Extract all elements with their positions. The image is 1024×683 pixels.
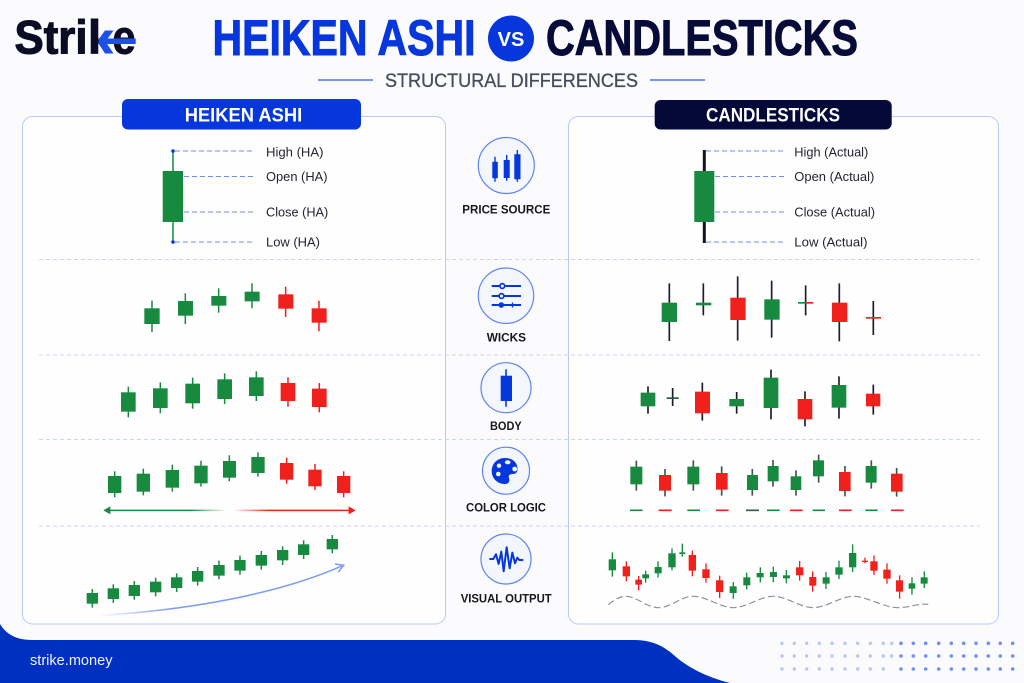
icon and label: body: BODY [490, 419, 522, 433]
icon and label: visual output [461, 534, 552, 605]
chart: candlestick color logic [630, 455, 904, 510]
title: VS [498, 29, 524, 51]
logo: Strike: e [112, 10, 136, 63]
icon and label: color logic [466, 447, 546, 514]
footer dot pattern [782, 643, 1013, 669]
chart: heiken ashi body [121, 371, 327, 417]
anatomy: actual candle [694, 144, 875, 250]
icon and label: price source: PRICE SOURCE [462, 202, 550, 216]
chart: heiken ashi wicks [144, 283, 327, 332]
icon and label: body [481, 363, 531, 433]
chart: candlestick visual output [608, 544, 928, 608]
anatomy: heiken ashi candle: Low (HA) [266, 234, 320, 250]
chart: heiken ashi color logic [103, 452, 356, 514]
banner: heiken ashi [122, 99, 361, 130]
icon and label: price source [462, 138, 550, 216]
title [212, 10, 858, 66]
dashed price wave [608, 596, 928, 608]
footer band [0, 624, 730, 683]
icon and label: wicks [478, 268, 534, 345]
logo: Strike [15, 18, 136, 54]
subtitle: STRUCTURAL DIFFERENCES [385, 70, 638, 92]
anatomy: actual candle: Open (Actual) [794, 169, 874, 184]
anatomy: actual candle: Low (Actual) [794, 234, 868, 250]
chart: heiken ashi visual output [87, 535, 344, 616]
title: CANDLESTICKS [546, 10, 858, 66]
panel: candlesticks [568, 100, 998, 624]
icon and label: color logic: COLOR LOGIC [466, 500, 546, 514]
logo: Strike: Stri [14, 10, 88, 63]
banner: heiken ashi: HEIKEN ASHI [185, 106, 302, 127]
anatomy: actual candle: Close (Actual) [794, 204, 875, 220]
title: HEIKEN ASHI [212, 10, 476, 66]
arrow: upward trend [98, 564, 344, 616]
color key dashes [630, 508, 904, 513]
banner: candlesticks: CANDLESTICKS [706, 106, 840, 127]
arrow: green direction [103, 506, 227, 514]
anatomy: heiken ashi candle: High (HA) [266, 144, 324, 160]
panel: heiken ashi [22, 99, 446, 624]
footer band: strike.money [30, 652, 113, 669]
anatomy: heiken ashi candle [163, 144, 328, 250]
arrow: red direction [233, 506, 356, 514]
icon and label: wicks: WICKS [487, 331, 526, 345]
anatomy: actual candle: High (Actual) [794, 144, 868, 160]
anatomy: heiken ashi candle: Close (HA) [266, 204, 328, 220]
logo: Strike: k [88, 10, 115, 63]
icon and label: visual output: VISUAL OUTPUT [461, 591, 552, 605]
chart: candlestick body [641, 370, 880, 426]
anatomy: heiken ashi candle: Open (HA) [266, 169, 328, 184]
chart: candlestick wicks [662, 276, 881, 341]
banner: candlesticks [655, 100, 892, 130]
